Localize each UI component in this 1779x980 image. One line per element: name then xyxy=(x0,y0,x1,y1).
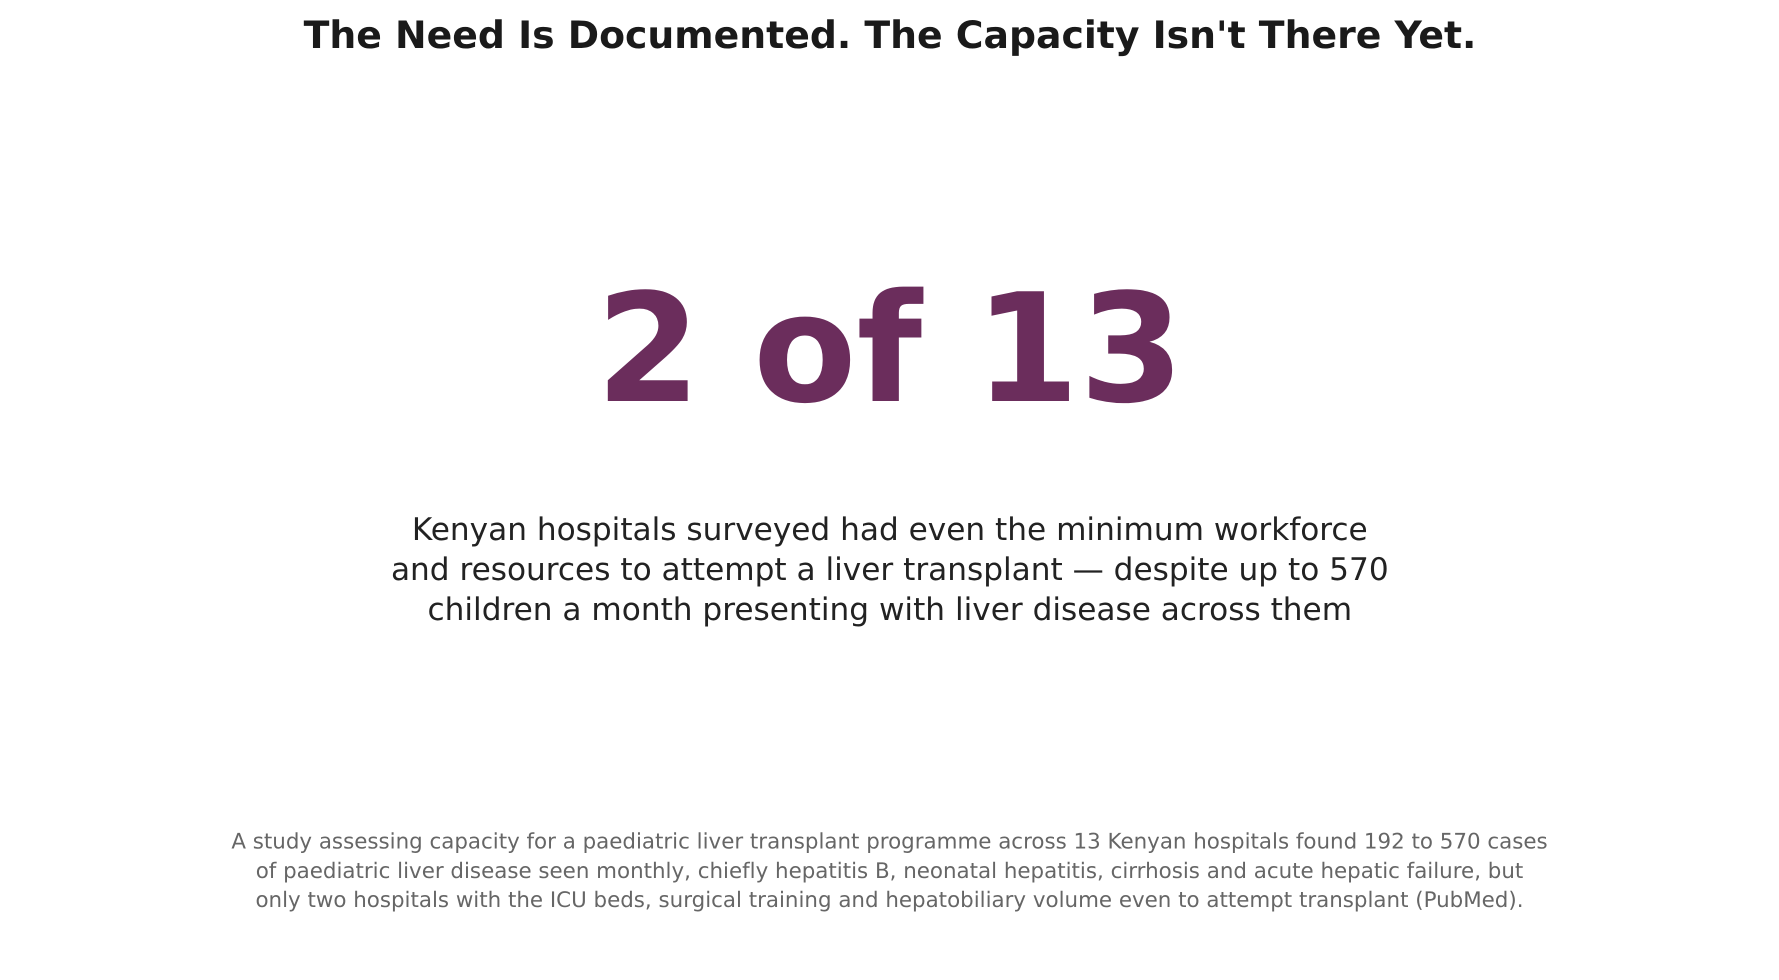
source note: of paediatric liver disease seen monthly, chiefly hepatitis B, neonatal hepatitis, cirrhosis and acute hepatic failure, but xyxy=(256,859,1523,884)
statistic description: Kenyan hospitals surveyed had even the minimum workforce xyxy=(412,512,1368,548)
title: The Need Is Documented. The Capacity Isn't There Yet. xyxy=(304,13,1476,57)
source note xyxy=(231,830,1548,913)
statistic description: children a month presenting with liver disease across them xyxy=(428,592,1352,628)
source note: A study assessing capacity for a paediatric liver transplant programme across 13 Kenyan hospitals found 192 to 570 cases xyxy=(231,830,1548,854)
big statistic: 2 of 13 xyxy=(596,261,1184,437)
source note: only two hospitals with the ICU beds, surgical training and hepatobiliary volume even to attempt transplant (PubMed). xyxy=(255,888,1524,913)
statistic description xyxy=(391,512,1389,628)
statistic description: and resources to attempt a liver transplant — despite up to 570 xyxy=(391,552,1389,588)
